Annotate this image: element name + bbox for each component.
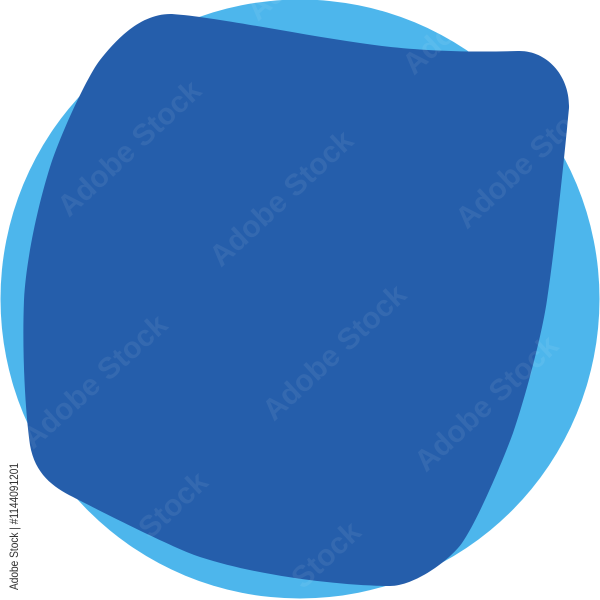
stock id: Adobe Stock | #1144091201 bbox=[7, 463, 21, 590]
watermark: Stock bbox=[132, 465, 215, 545]
watermark: Stock bbox=[285, 515, 368, 595]
watermark: Adobe Stock bbox=[203, 124, 360, 273]
watermark: Adobe Stock bbox=[16, 308, 174, 455]
watermark: Adob bbox=[396, 5, 475, 81]
watermark: Adobe Stock bbox=[51, 74, 208, 223]
watermark: Adobe Stock bbox=[256, 278, 413, 427]
watermark: Adobe Stock bbox=[408, 329, 565, 478]
